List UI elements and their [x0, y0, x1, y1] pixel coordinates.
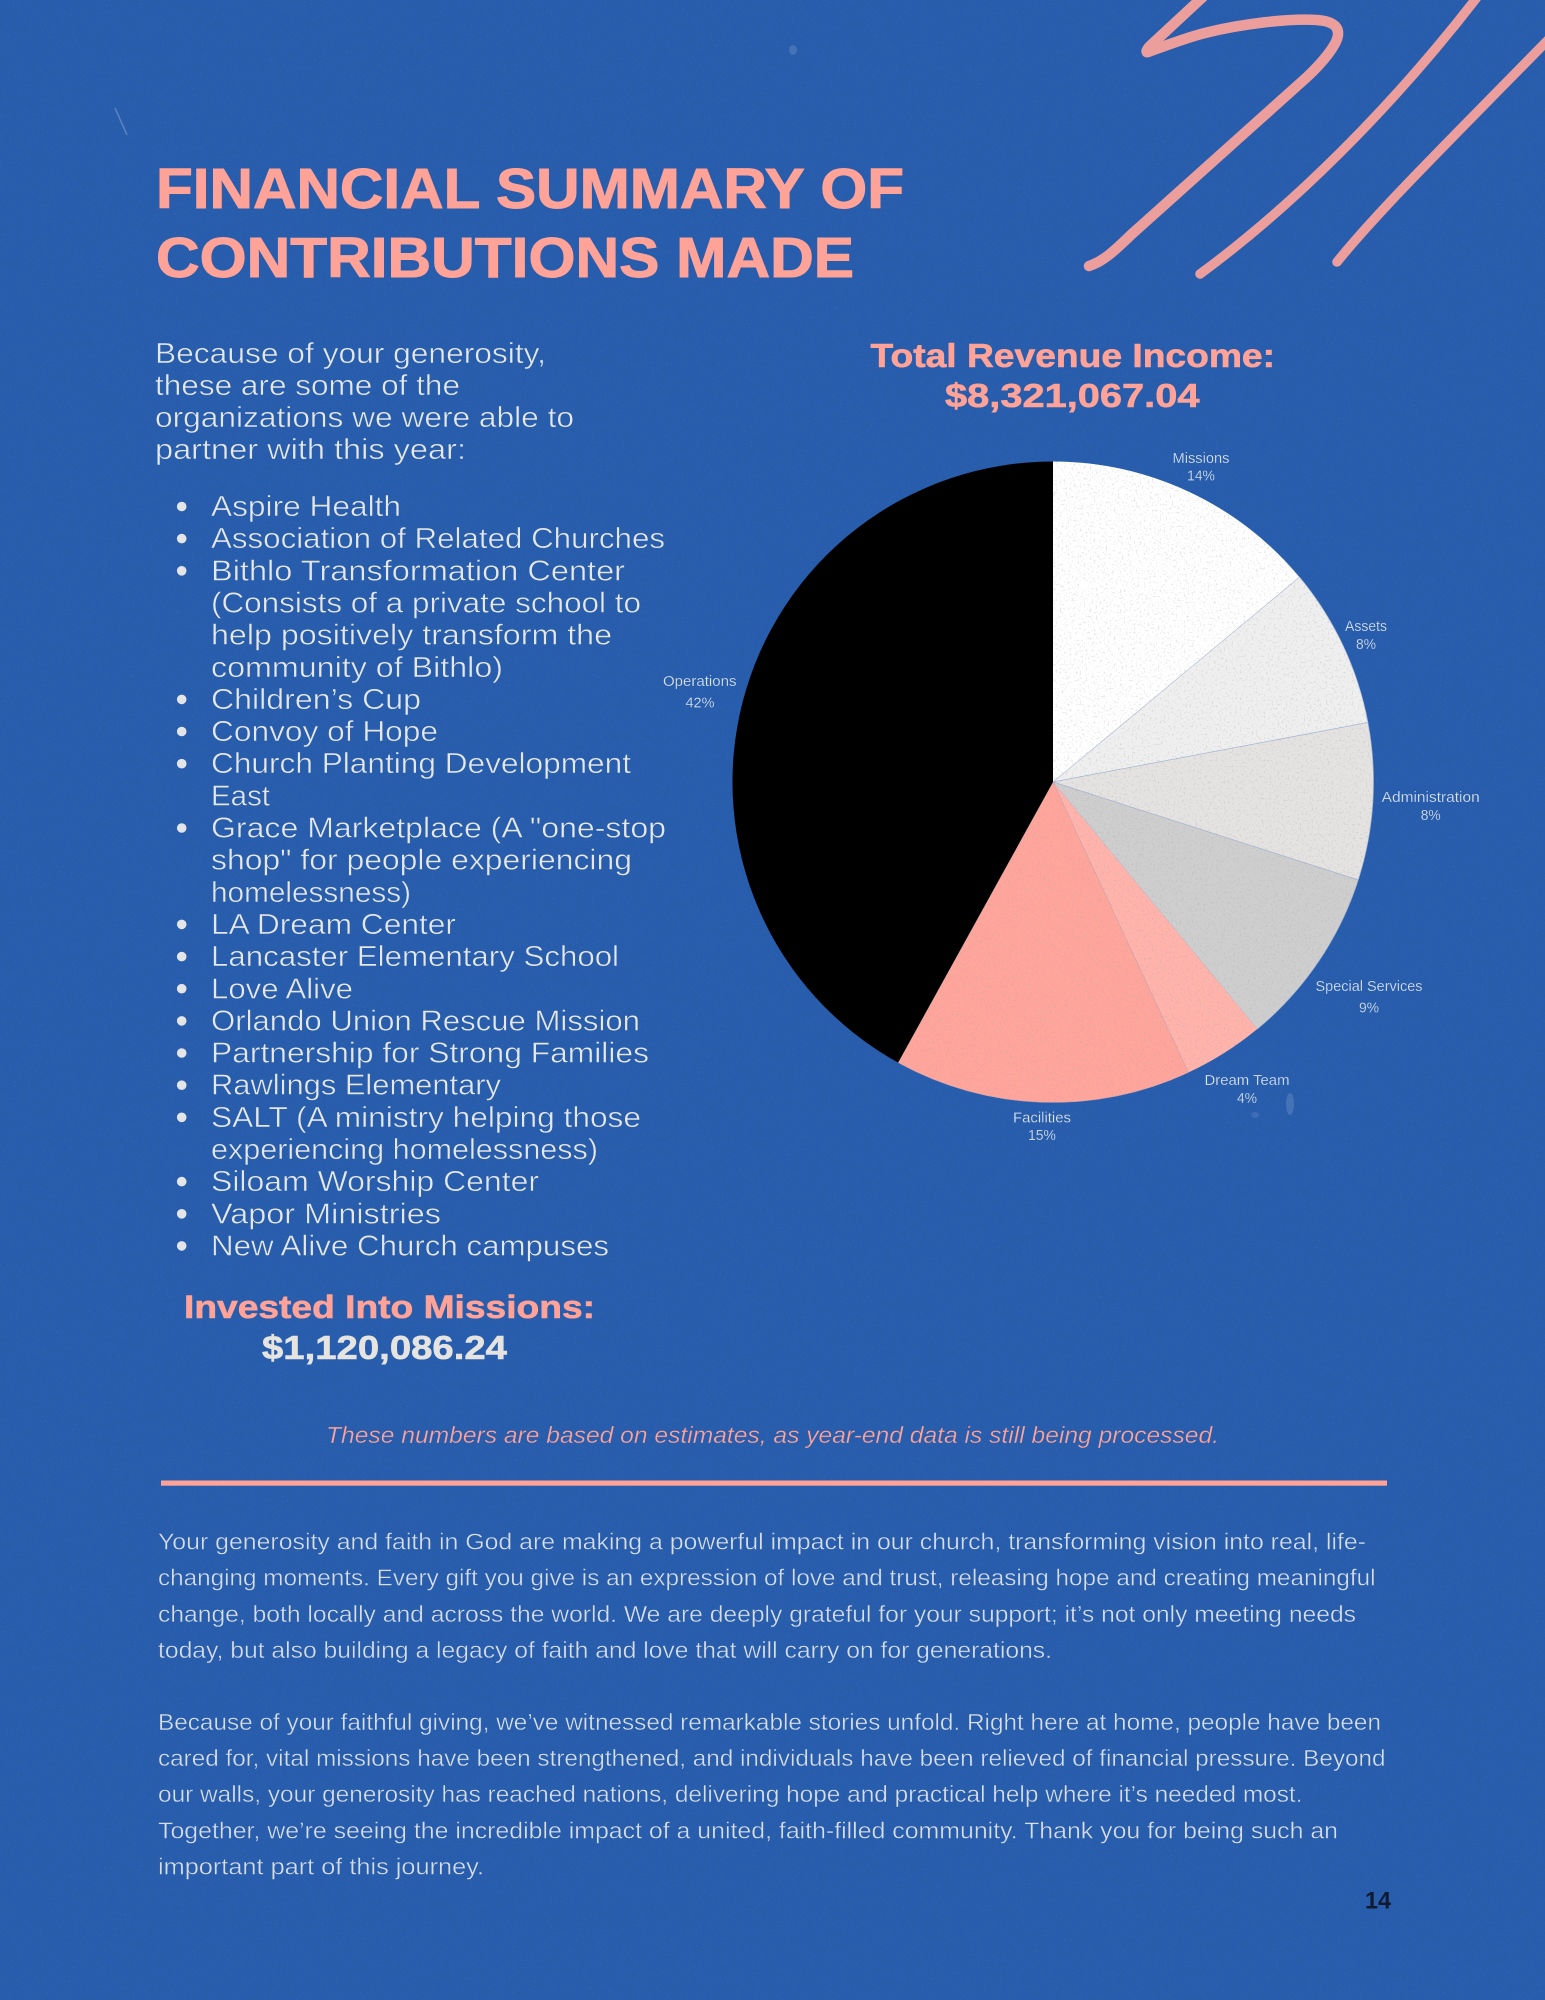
partner organizations bulleted list: Orlando Union Rescue Mission — [211, 1005, 640, 1037]
partner organizations bulleted list: East — [211, 780, 270, 812]
partner organizations bulleted list: Aspire Health — [211, 491, 401, 523]
partner organizations bulleted list: help positively transform the — [211, 620, 612, 652]
label: facilities — [1013, 1111, 1071, 1144]
thank-you paragraph one: Your generosity and faith in God are making a powerful impact in our church, transforming vision into real, life- — [158, 1528, 1366, 1554]
estimate disclaimer note: These numbers are based on estimates, as year-end data is still being processed. — [326, 1422, 1219, 1448]
label: dream team — [1204, 1073, 1290, 1107]
partner organizations bulleted list: SALT (A ministry helping those — [211, 1102, 641, 1134]
invested into missions callout — [184, 1289, 595, 1366]
intro text: these are some of the — [155, 370, 460, 402]
label: missions: 14% — [1187, 468, 1215, 484]
label: missions — [1172, 451, 1230, 484]
thank-you paragraph two: important part of this journey. — [158, 1854, 484, 1880]
label: administration: 8% — [1421, 808, 1441, 824]
label: special services: 9% — [1359, 1000, 1379, 1016]
total revenue income callout — [870, 337, 1275, 414]
intro text — [155, 338, 574, 466]
title: CONTRIBUTIONS MADE — [156, 226, 854, 290]
partner organizations bulleted list: Rawlings Elementary — [211, 1070, 502, 1102]
thank-you paragraph two: cared for, vital missions have been strengthened, and individuals have been relieved of financial pressure. Beyond — [158, 1745, 1386, 1771]
total revenue income callout: $8,321,067.04 — [945, 377, 1200, 414]
slice: missions 14% — [1053, 461, 1300, 782]
thank-you paragraph two: Because of your faithful giving, we’ve witnessed remarkable stories unfold. Right here at home, people have been — [158, 1709, 1381, 1735]
title — [156, 157, 904, 290]
label: operations: 42% — [686, 696, 715, 712]
label: facilities: Facilities — [1013, 1111, 1071, 1127]
partner organizations bulleted list — [177, 491, 666, 1262]
thank-you paragraph one: today, but also building a legacy of faith and love that will carry on for generations. — [158, 1637, 1052, 1663]
pie labels — [663, 451, 1480, 1144]
invested into missions callout: $1,120,086.24 — [262, 1329, 508, 1366]
partner organizations bulleted list: experiencing homelessness) — [211, 1134, 598, 1166]
label: administration: Administration — [1382, 790, 1480, 806]
partner organizations bulleted list: Convoy of Hope — [211, 716, 438, 748]
label: special services — [1316, 979, 1422, 1016]
label: dream team: Dream Team — [1204, 1073, 1290, 1089]
label: special services: Special Services — [1316, 979, 1422, 995]
partner organizations bulleted list: LA Dream Center — [211, 909, 456, 941]
slice: operations 42% — [732, 462, 1053, 1063]
label: operations — [663, 674, 736, 712]
decorative salmon squiggle strokes — [1089, 0, 1545, 274]
partner organizations bulleted list: Association of Related Churches — [211, 523, 665, 555]
total revenue income callout: Total Revenue Income: — [870, 337, 1275, 374]
partner organizations bulleted list: Partnership for Strong Families — [211, 1038, 649, 1070]
partner organizations bulleted list: Lancaster Elementary School — [211, 941, 619, 973]
slice: dream team 4% — [1053, 782, 1257, 1072]
slice: facilities 15% — [898, 782, 1188, 1103]
partner organizations bulleted list: New Alive Church campuses — [211, 1230, 609, 1262]
invested into missions callout: Invested Into Missions: — [184, 1289, 595, 1325]
thank-you paragraph one: change, both locally and across the world. We are deeply grateful for your support; it’s not only meeting needs — [158, 1601, 1356, 1627]
thank-you paragraph one — [158, 1528, 1375, 1663]
thank-you paragraph one: changing moments. Every gift you give is an expression of love and trust, releasing hope and creating meaningful — [158, 1564, 1375, 1590]
partner organizations bulleted list: Vapor Ministries — [211, 1198, 441, 1230]
label: operations: Operations — [663, 674, 736, 690]
label: administration — [1382, 790, 1480, 824]
label: assets: 8% — [1356, 637, 1376, 653]
partner organizations bulleted list: Children’s Cup — [211, 684, 421, 716]
partner organizations bulleted list: shop" for people experiencing — [211, 845, 632, 877]
slice: administration 8% — [1053, 722, 1374, 880]
thank-you paragraph two — [158, 1709, 1386, 1880]
partner organizations bulleted list: (Consists of a private school to — [211, 588, 641, 620]
label: facilities: 15% — [1028, 1128, 1056, 1144]
page number: 14 — [1365, 1888, 1392, 1915]
partner organizations bulleted list: Grace Marketplace (A "one-stop — [211, 812, 666, 844]
intro text: Because of your generosity, — [155, 338, 546, 370]
partner organizations bulleted list: Love Alive — [211, 973, 353, 1005]
slice: assets 8% — [1053, 577, 1368, 782]
thank-you paragraph two: our walls, your generosity has reached nations, delivering hope and practical help where it’s needed most. — [158, 1781, 1302, 1807]
pie chart: contributions by category — [732, 455, 1380, 1110]
label: assets — [1345, 619, 1387, 653]
intro text: partner with this year: — [155, 434, 466, 466]
label: assets: Assets — [1345, 619, 1387, 635]
partner organizations bulleted list: Bithlo Transformation Center — [211, 555, 625, 587]
title: FINANCIAL SUMMARY OF — [156, 157, 904, 221]
intro text: organizations we were able to — [155, 402, 574, 434]
thank-you paragraph two: Together, we’re seeing the incredible impact of a united, faith-filled community. Thank you for being such an — [158, 1817, 1338, 1843]
label: missions: Missions — [1172, 451, 1230, 467]
partner organizations bulleted list: Siloam Worship Center — [211, 1166, 539, 1198]
partner organizations bulleted list: Church Planting Development — [211, 748, 631, 780]
partner organizations bulleted list: community of Bithlo) — [211, 652, 503, 684]
label: dream team: 4% — [1237, 1091, 1257, 1107]
slice: special services 9% — [1053, 782, 1358, 1029]
partner organizations bulleted list: homelessness) — [211, 877, 411, 909]
